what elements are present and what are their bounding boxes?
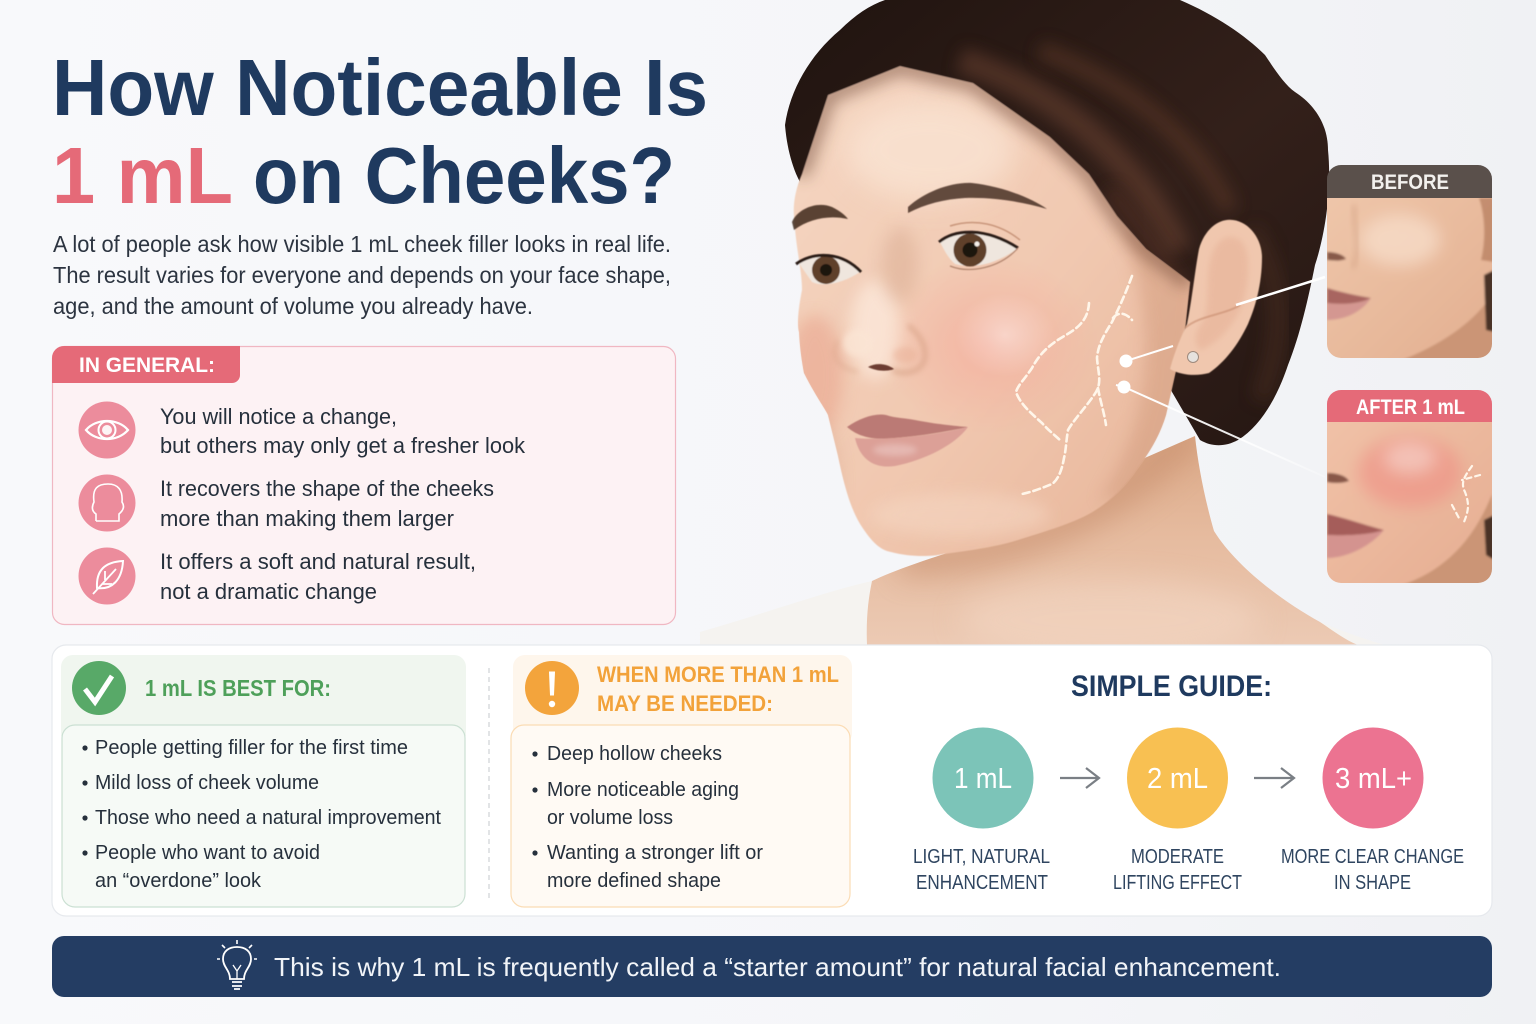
list: best for: People who want to avoid xyxy=(95,841,320,864)
step: 3 mL+: 3 mL+ xyxy=(1335,763,1412,795)
nose xyxy=(835,325,925,373)
face skin xyxy=(794,66,1190,556)
intro paragraph: age, and the amount of volume you already have. xyxy=(53,293,533,319)
list: more than 1 mL: more defined shape xyxy=(547,869,721,892)
text: notice xyxy=(160,404,526,458)
white top garment xyxy=(700,581,1385,645)
step: 2 mL: MODERATE xyxy=(1131,846,1224,868)
panel: when more than 1 mL xyxy=(511,655,852,907)
panel: 1 mL is best for xyxy=(61,655,466,907)
list: best for: People getting filler for the first time xyxy=(95,736,408,759)
banner text: This is why 1 mL is frequently called a “starter amount” for natural facial enhancement. xyxy=(274,952,1281,982)
step: 3 mL+: MORE CLEAR CHANGE xyxy=(1281,846,1464,868)
panel: simple guide xyxy=(913,670,1464,894)
list: more than 1 mL xyxy=(532,742,763,892)
text: natural: It offers a soft and natural result, xyxy=(160,549,476,574)
step: 1 mL: ENHANCEMENT xyxy=(916,872,1048,894)
icon: head xyxy=(78,474,136,532)
step: 2 mL: 2 mL xyxy=(1147,763,1208,795)
icon: check xyxy=(72,661,126,715)
text: natural: not a dramatic change xyxy=(160,579,377,604)
list: best for: an “overdone” look xyxy=(95,869,262,892)
step: 3 mL+ xyxy=(1281,728,1464,894)
arrow: 2 to 3 xyxy=(1254,768,1294,788)
eye: far side xyxy=(796,255,861,284)
filler injection marks xyxy=(1016,276,1132,494)
intro paragraph: A lot of people ask how visible 1 mL cheek filler looks in real life. xyxy=(53,231,671,257)
step: 1 mL: 1 mL xyxy=(954,763,1012,795)
list: best for: Those who need a natural improvement xyxy=(95,806,441,829)
lips xyxy=(847,415,968,467)
banner xyxy=(52,936,1492,997)
before header: BEFORE xyxy=(1371,171,1449,194)
panel: in general xyxy=(52,346,676,624)
ear xyxy=(1170,220,1262,375)
list: more than 1 mL: Deep hollow cheeks xyxy=(547,742,722,765)
title: on Cheeks? xyxy=(253,131,675,220)
text: notice: but others may only get a fresher look xyxy=(160,433,526,458)
face shading xyxy=(787,66,1200,540)
portrait photo illustration xyxy=(700,0,1385,660)
text: shape: more than making them larger xyxy=(160,506,454,531)
intro paragraph: The result varies for everyone and depends on your face shape, xyxy=(53,262,671,288)
eye: near side xyxy=(939,222,1020,269)
icon: light bulb xyxy=(217,940,257,989)
heading: more than 1 mL: MAY BE NEEDED: xyxy=(597,691,773,716)
list: more than 1 mL: Wanting a stronger lift or xyxy=(547,841,763,864)
step: 2 mL: LIFTING EFFECT xyxy=(1113,872,1242,894)
text: natural xyxy=(160,549,476,604)
panel: bottom information card xyxy=(52,645,1492,916)
list: more than 1 mL: or volume loss xyxy=(547,806,673,829)
in general tab: IN GENERAL: xyxy=(79,354,215,377)
step: 1 mL: LIGHT, NATURAL xyxy=(913,846,1050,868)
list: best for: Mild loss of cheek volume xyxy=(95,771,319,794)
earring xyxy=(1188,352,1198,362)
text: shape: It recovers the shape of the cheeks xyxy=(160,476,494,501)
title: 1 mL xyxy=(52,131,233,220)
heading: simple guide: SIMPLE GUIDE: xyxy=(1071,670,1272,703)
heading: more than 1 mL xyxy=(597,662,839,716)
callout lines and dots xyxy=(1116,277,1325,477)
list: best for xyxy=(82,736,441,892)
intro paragraph xyxy=(53,231,671,319)
brow: far side xyxy=(792,205,848,230)
list: more than 1 mL: More noticeable aging xyxy=(547,778,739,801)
after photo panel xyxy=(1327,390,1492,583)
step: 2 mL xyxy=(1113,728,1242,894)
brow: near side xyxy=(908,183,1047,213)
arrow: 1 to 2 xyxy=(1060,768,1099,788)
before header xyxy=(1327,165,1492,198)
step: 3 mL+: IN SHAPE xyxy=(1334,872,1411,894)
after header: AFTER 1 mL xyxy=(1356,396,1465,419)
hair xyxy=(770,0,1340,460)
icon: exclamation xyxy=(525,661,579,715)
icon: leaf xyxy=(78,548,136,604)
before photo panel xyxy=(1327,165,1492,358)
after header xyxy=(1327,390,1492,422)
icon: eye xyxy=(78,402,136,458)
text: notice: You will notice a change, xyxy=(160,404,397,429)
title: How Noticeable Is xyxy=(52,43,708,132)
heading: more than 1 mL: WHEN MORE THAN 1 mL xyxy=(597,662,839,687)
text: shape xyxy=(160,476,494,531)
heading: best for: 1 mL IS BEST FOR: xyxy=(145,675,331,701)
in general tab xyxy=(52,346,240,383)
step: 1 mL xyxy=(913,728,1050,894)
title xyxy=(52,43,708,220)
neck xyxy=(866,436,1356,644)
